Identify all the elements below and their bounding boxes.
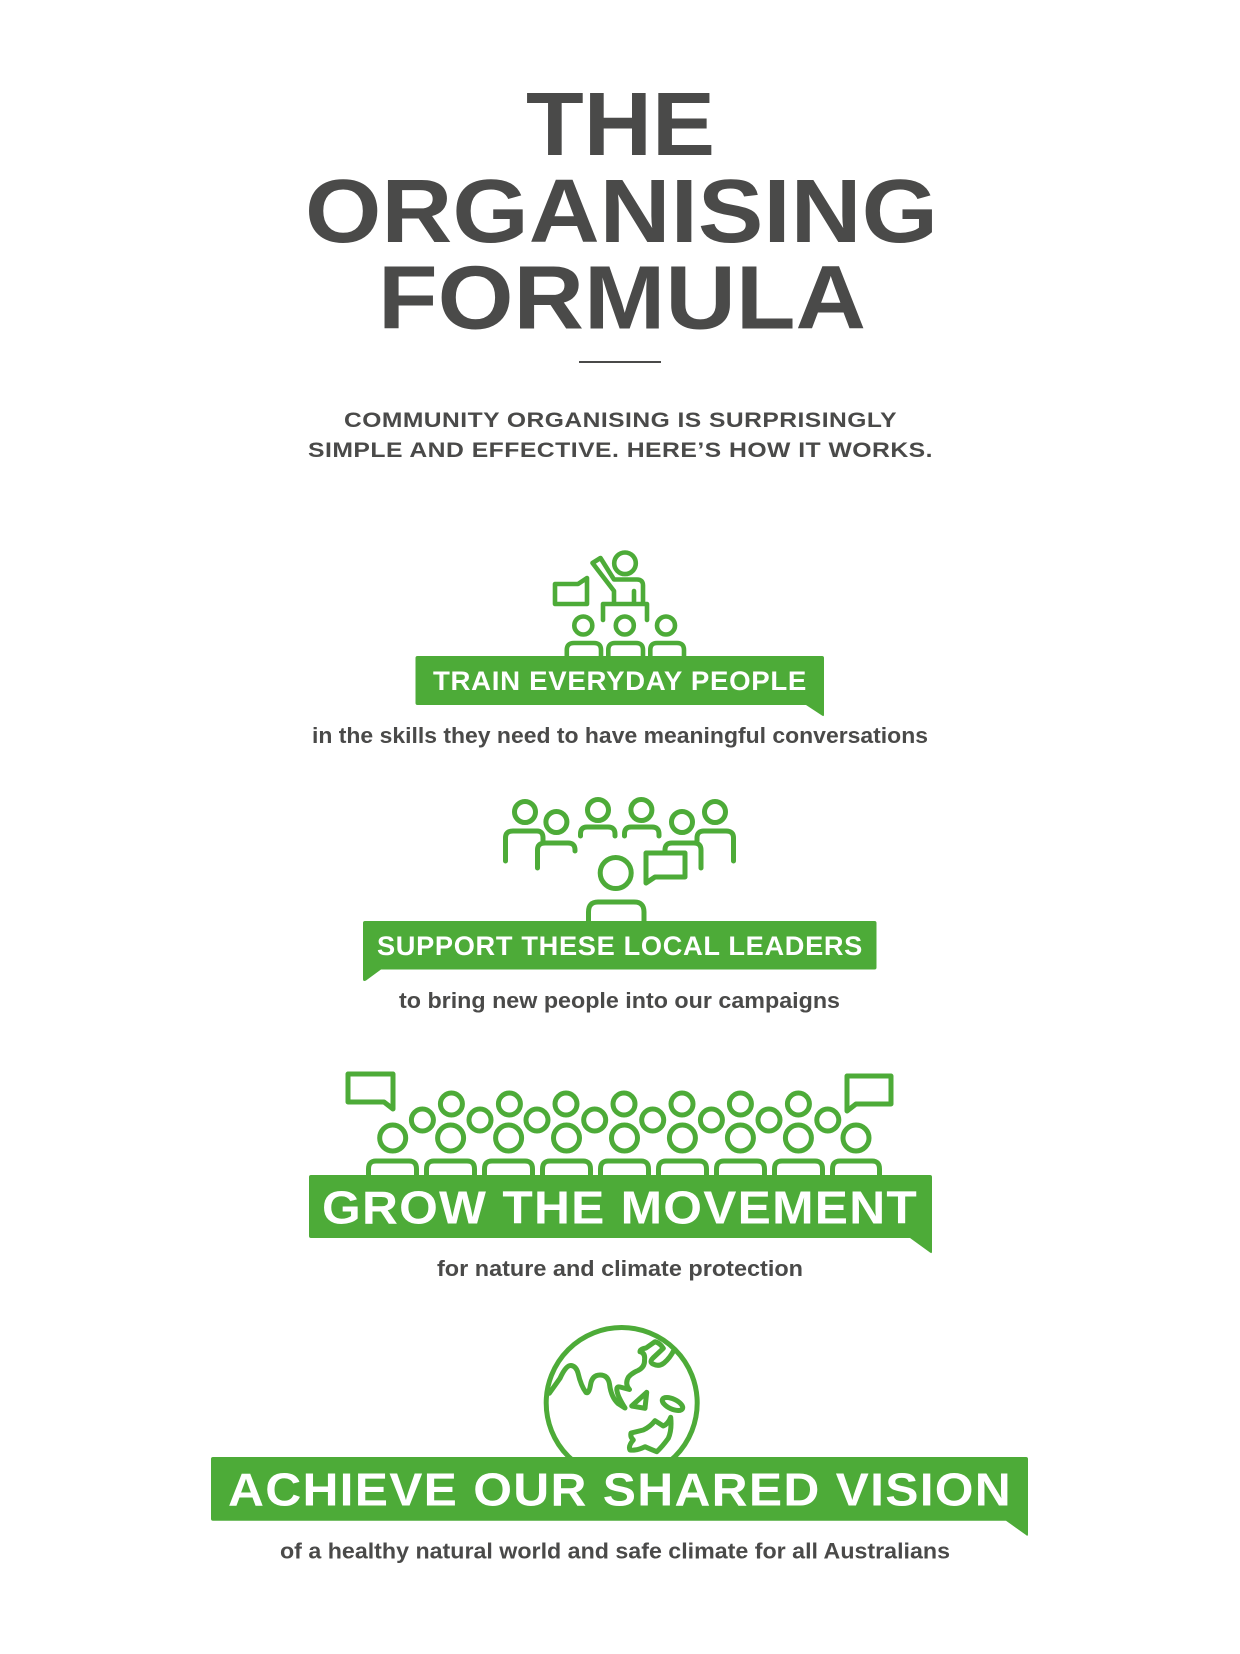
banner: grow the movement: [309, 1175, 932, 1253]
banner: support these local leaders: [363, 921, 876, 981]
icon: trainer with audience: [555, 552, 684, 656]
title: THE: [526, 75, 715, 175]
banner heading: SUPPORT THESE LOCAL LEADERS: [377, 931, 863, 961]
step 2: support local leaders: [363, 800, 876, 1013]
icon: leader with group: [506, 800, 734, 921]
step 3: grow the movement: [309, 1074, 932, 1281]
step 4: achieve our shared vision: [211, 1328, 1028, 1564]
description: of a healthy natural world and safe climate for all Australians: [280, 1538, 950, 1564]
intro text: SIMPLE AND EFFECTIVE. HERE’S HOW IT WORKS.: [308, 439, 933, 462]
banner: train everyday people: [416, 656, 824, 716]
intro text: [308, 409, 933, 462]
banner heading: TRAIN EVERYDAY PEOPLE: [433, 666, 807, 696]
banner: achieve our shared vision: [211, 1457, 1028, 1536]
title: [305, 75, 938, 348]
banner heading: ACHIEVE OUR SHARED VISION: [228, 1464, 1012, 1516]
step 1: train everyday people: [312, 552, 928, 748]
description: to bring new people into our campaigns: [399, 988, 840, 1013]
icon: globe: [546, 1328, 697, 1478]
description: for nature and climate protection: [437, 1256, 803, 1281]
intro text: COMMUNITY ORGANISING IS SURPRISINGLY: [344, 409, 897, 432]
title: ORGANISING: [305, 162, 938, 262]
banner heading: GROW THE MOVEMENT: [322, 1182, 918, 1234]
description: in the skills they need to have meaningful conversations: [312, 723, 928, 748]
title: FORMULA: [378, 248, 866, 348]
icon: crowd with speech bubbles: [348, 1074, 891, 1176]
